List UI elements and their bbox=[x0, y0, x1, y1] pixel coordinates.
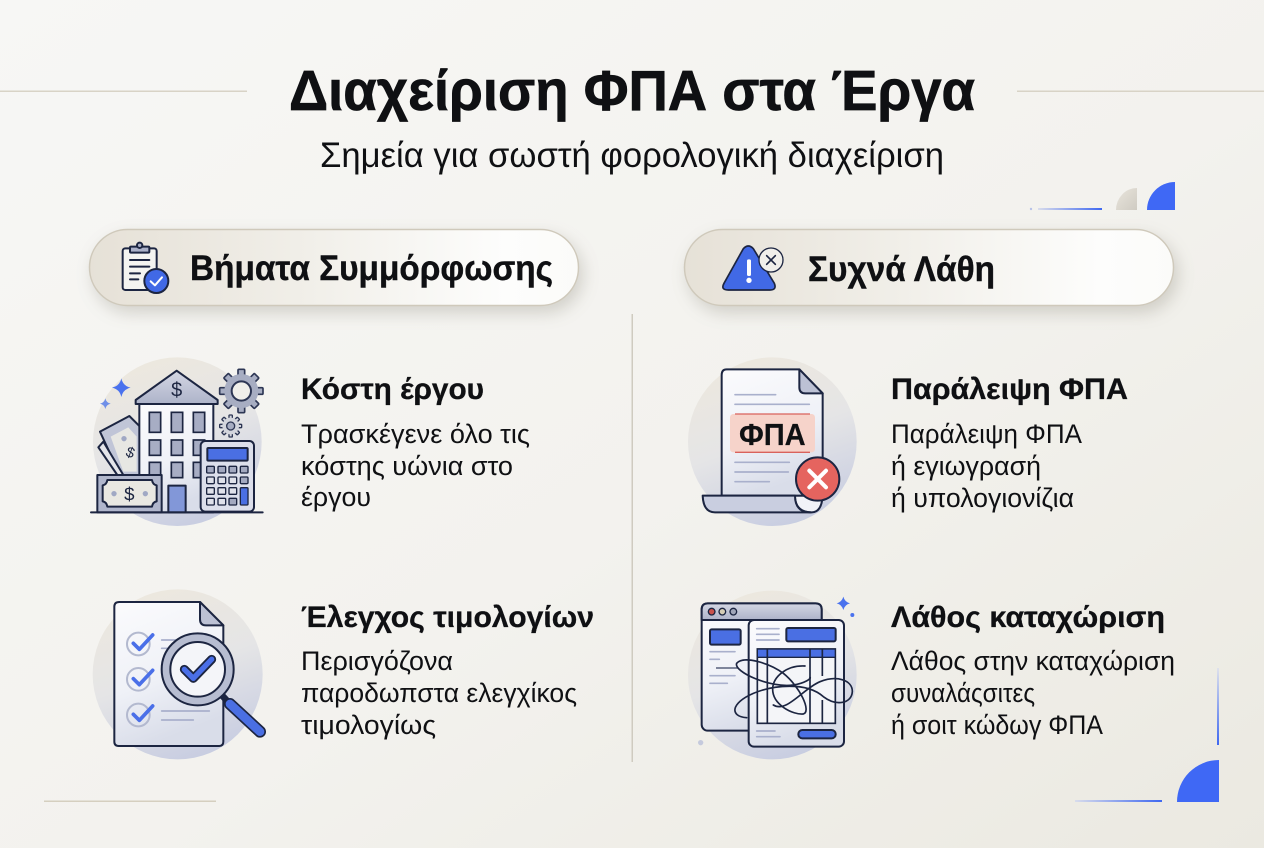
icon: clipboard with check bbox=[123, 243, 168, 293]
panel: VAT omission bbox=[688, 357, 1128, 526]
icon: tangled table windows bbox=[688, 591, 857, 759]
icon: warning triangle bbox=[723, 246, 783, 290]
icon: building, cash, calculator, gears: $ bbox=[124, 444, 137, 462]
item text: Τρασκέγενε όλο τις bbox=[301, 419, 530, 449]
item heading: Κόστη έργου bbox=[301, 373, 484, 406]
panel: wrong entry bbox=[688, 591, 1175, 759]
decoration: bottom right corner shapes bbox=[1075, 668, 1219, 802]
icon: building, cash, calculator, gears: $ bbox=[124, 483, 135, 504]
icon: VAT document with error: ФПА bbox=[739, 418, 806, 452]
item text: ή υπολογιονίζια bbox=[891, 483, 1074, 513]
item heading: Παράλειψη ΦΠΑ bbox=[891, 373, 1128, 406]
item heading: Λάθος καταχώριση bbox=[891, 601, 1165, 634]
icon: VAT document with error bbox=[688, 357, 857, 526]
item text: ή σοιτ κώδωγ ΦΠΑ bbox=[891, 710, 1103, 740]
item text: ή εγιωγρασή bbox=[891, 451, 1041, 481]
item text: παροδωπστα ελεγχίκος bbox=[301, 678, 577, 708]
item text: έργου bbox=[301, 482, 371, 512]
item heading: Έλεγχος τιμολογίων bbox=[301, 601, 594, 634]
item text: Λάθος στην καταχώριση bbox=[891, 646, 1175, 676]
item text: Παράλειψη ΦΠΑ bbox=[891, 419, 1082, 449]
heading: common mistakes: Συχνά Λάθη bbox=[808, 250, 995, 289]
item text bbox=[301, 419, 530, 512]
item text bbox=[891, 646, 1175, 740]
icon: building, cash, calculator, gears: $ bbox=[171, 380, 182, 402]
title: Διαχείριση ΦΠΑ στα Έργα bbox=[289, 59, 975, 123]
subtitle: Σημεία για σωστή φορολογική διαχείριση bbox=[320, 136, 944, 175]
panel: common mistakes header bbox=[684, 230, 1174, 306]
panel: invoice checks bbox=[93, 589, 594, 759]
heading: compliance steps: Βήματα Συμμόρφωσης bbox=[190, 249, 553, 288]
item text: συναλάςσιτες bbox=[891, 678, 1035, 708]
item text: τιμολογίως bbox=[301, 710, 436, 740]
item text bbox=[891, 419, 1082, 513]
icon: building, cash, calculator, gears bbox=[91, 357, 263, 526]
icon: checklist with magnifier bbox=[93, 589, 263, 759]
panel: compliance steps header bbox=[90, 230, 578, 306]
item text: Περισγόζονα bbox=[301, 646, 453, 676]
item text bbox=[301, 646, 577, 740]
item text: κόστης υώνια στο bbox=[301, 451, 513, 481]
decoration: top right corner shapes bbox=[1030, 182, 1175, 210]
panel: project costs bbox=[91, 357, 530, 526]
